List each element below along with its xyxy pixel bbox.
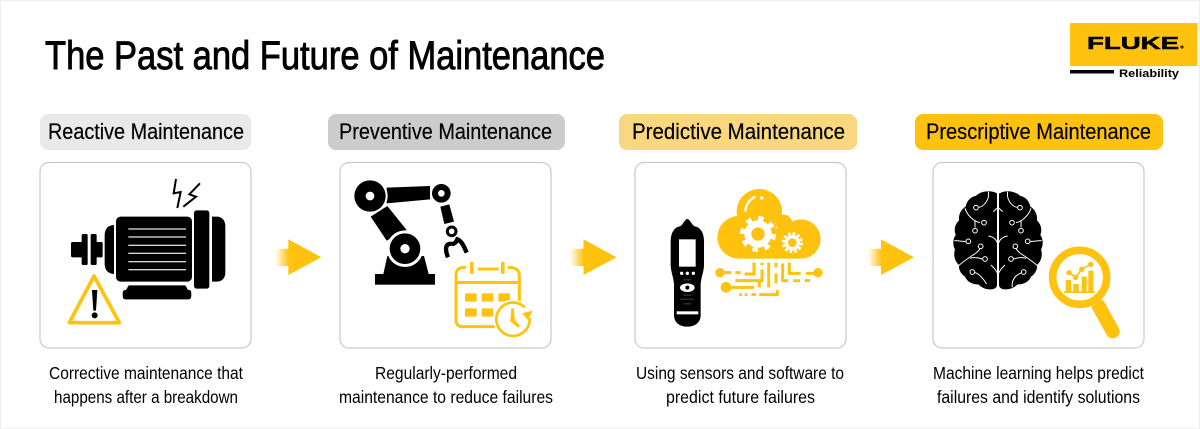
icon: handheld sensor device xyxy=(671,219,704,327)
icon: cloud with gears xyxy=(717,189,821,259)
icon: robot arm xyxy=(352,178,467,285)
description: predictive: Using sensors and software to xyxy=(636,363,844,383)
heading: predictive maintenance xyxy=(619,114,857,150)
icon: circuit traces xyxy=(715,263,823,295)
logo: Fluke Reliability: FLUKE xyxy=(1087,33,1179,53)
logo: Fluke Reliability: Reliability xyxy=(1119,68,1180,80)
heading: prescriptive maintenance: Prescriptive Maintenance xyxy=(926,119,1151,144)
icon: electric motor xyxy=(71,210,225,299)
icon: calendar with clock xyxy=(456,262,533,338)
heading: predictive maintenance: Predictive Maintenance xyxy=(632,119,845,144)
description: preventive xyxy=(339,363,553,407)
title: The Past and Future of Maintenance xyxy=(45,34,605,78)
description: predictive: predict future failures xyxy=(666,387,815,407)
icon: circuit brain xyxy=(953,191,1043,289)
panel: reactive maintenance xyxy=(40,114,251,407)
logo: Fluke Reliability xyxy=(1070,23,1198,80)
description: reactive xyxy=(49,363,243,407)
description: prescriptive xyxy=(933,363,1144,407)
icon: lightning sparks xyxy=(174,179,200,208)
heading: preventive maintenance: Preventive Maintenance xyxy=(339,119,552,144)
description: prescriptive: failures and identify solutions xyxy=(937,387,1140,407)
description: preventive: Regularly-performed xyxy=(375,363,517,383)
panel: prescriptive maintenance xyxy=(915,114,1163,407)
heading: reactive maintenance xyxy=(40,114,251,150)
arrow 3 xyxy=(868,239,914,275)
description: reactive: happens after a breakdown xyxy=(54,387,238,407)
heading: reactive maintenance: Reactive Maintenance xyxy=(48,119,244,144)
heading: preventive maintenance xyxy=(328,114,565,150)
arrow 2 xyxy=(570,239,616,275)
icon card: motor xyxy=(40,162,251,348)
description: predictive xyxy=(636,363,844,407)
icon card: sensor and cloud xyxy=(635,162,846,348)
description: prescriptive: Machine learning helps predict xyxy=(933,363,1144,383)
icon card: brain and magnifier xyxy=(933,162,1144,348)
description: preventive: maintenance to reduce failures xyxy=(339,387,553,407)
description: reactive: Corrective maintenance that xyxy=(49,363,243,383)
arrow 1 xyxy=(275,239,321,275)
icon: magnifier with chart xyxy=(1049,246,1113,331)
icon card: robot and calendar xyxy=(340,162,551,348)
heading: prescriptive maintenance xyxy=(915,114,1163,150)
icon: warning triangle xyxy=(69,276,119,323)
panel: predictive maintenance xyxy=(619,114,857,407)
panel: preventive maintenance xyxy=(328,114,565,407)
